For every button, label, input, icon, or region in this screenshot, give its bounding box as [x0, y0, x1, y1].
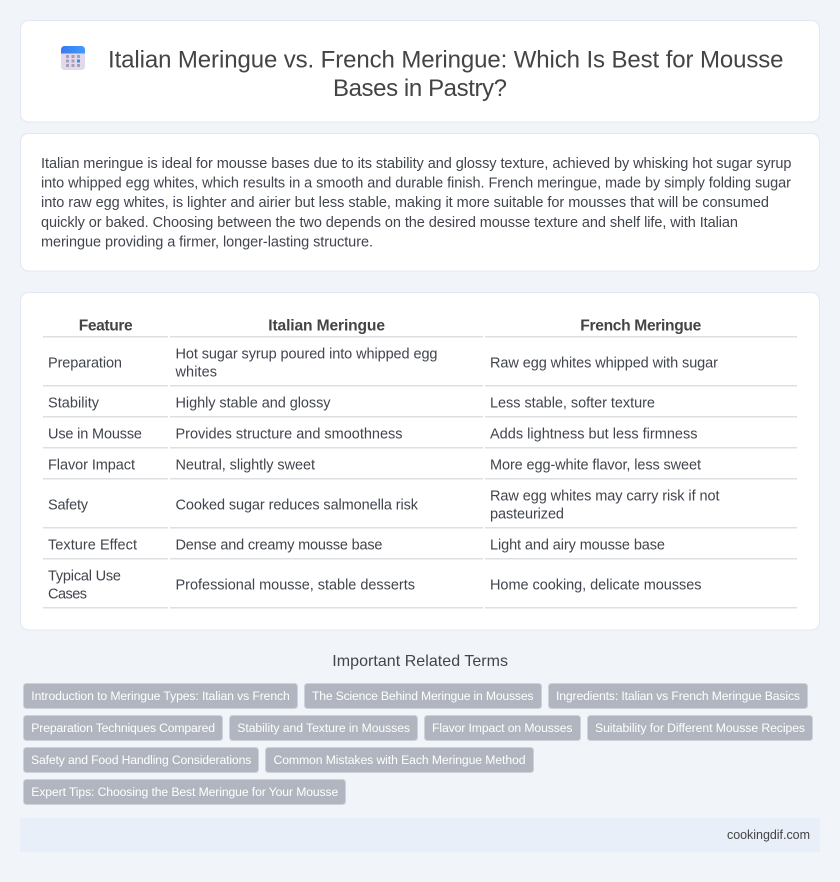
- tag: Suitability for Different Mousse Recipes: [595, 721, 805, 735]
- row: safety: pasteurized: [490, 506, 564, 522]
- intro text block: into raw egg whites, is lighter and airier but less stable, making it more suitable for mousses that will be consumed: [41, 195, 769, 211]
- row: stability: Less stable, softer texture: [490, 395, 655, 411]
- panel: title header: [20, 20, 820, 122]
- row: preparation: whites: [174, 364, 217, 380]
- row: safety: Safety: [48, 497, 89, 513]
- table header row: Feature: [79, 318, 133, 334]
- row: preparation: Raw egg whites whipped with sugar: [490, 355, 718, 371]
- row: typical use cases: Home cooking, delicate mousses: [490, 577, 702, 593]
- row: typical use cases: Professional mousse, stable desserts: [176, 577, 415, 593]
- row: stability: [43, 395, 797, 418]
- row: typical use cases: Typical Use: [48, 568, 121, 584]
- row: flavor impact: Neutral, slightly sweet: [176, 457, 315, 473]
- footer bar: [20, 818, 820, 852]
- row: use in mousse: [43, 426, 797, 448]
- tag: Common Mistakes with Each Meringue Method: [274, 753, 526, 767]
- panel: intro paragraph: [20, 134, 820, 271]
- row: texture effect: Texture Effect: [48, 537, 137, 553]
- row: flavor impact: Flavor Impact: [48, 457, 135, 473]
- tag: [304, 684, 542, 708]
- tag: [24, 748, 258, 772]
- row: use in mousse: Use in Mousse: [48, 426, 142, 442]
- tag: [266, 748, 534, 772]
- intro text block: quickly or baked. Choosing between the two depends on the desired mousse texture and shelf life, with Italian: [41, 215, 738, 231]
- icon: calendar: [61, 46, 85, 70]
- row: texture effect: Dense and creamy mousse base: [176, 537, 382, 553]
- row: preparation: Preparation: [48, 355, 122, 371]
- row: preparation: [43, 346, 797, 386]
- panel: comparison table: [20, 292, 820, 630]
- tag: Introduction to Meringue Types: Italian vs French: [31, 689, 290, 703]
- intro text block: meringue providing a firmer, longer-lasting structure.: [41, 234, 373, 250]
- tag: The Science Behind Meringue in Mousses: [312, 689, 534, 703]
- intro text block: [41, 156, 792, 250]
- row: typical use cases: Cases: [48, 586, 87, 602]
- title: Bases in Pastry?: [333, 75, 507, 102]
- heading: important related terms: Important Related Terms: [332, 653, 508, 670]
- title: [108, 46, 784, 102]
- row: texture effect: Light and airy mousse base: [490, 537, 665, 553]
- tag: [24, 716, 222, 740]
- intro text block: into whipped egg whites, which results in a smooth and durable finish. French meringue, made by simply folding sugar: [41, 176, 791, 192]
- tag: [230, 716, 418, 740]
- table header row: Italian Meringue: [268, 318, 385, 334]
- footer source link: cookingdif.com: [727, 828, 810, 842]
- row: flavor impact: [43, 457, 797, 480]
- row: stability: Stability: [48, 395, 100, 411]
- tag: [424, 716, 580, 740]
- row: use in mousse: Adds lightness but less firmness: [490, 426, 698, 442]
- tag: Flavor Impact on Mousses: [432, 721, 572, 735]
- row: stability: Highly stable and glossy: [176, 395, 331, 411]
- row: use in mousse: Provides structure and smoothness: [176, 426, 402, 442]
- tag: [548, 684, 808, 708]
- tag: [24, 780, 346, 804]
- tag list: related terms: [24, 684, 812, 804]
- intro text block: Italian meringue is ideal for mousse bases due to its stability and glossy texture, achieved by whisking hot sugar syrup: [41, 156, 792, 172]
- tag: Ingredients: Italian vs French Meringue Basics: [556, 689, 800, 703]
- row: texture effect: [43, 537, 797, 560]
- tag: Safety and Food Handling Considerations: [31, 753, 251, 767]
- row: typical use cases: [43, 568, 797, 608]
- table header row: French Meringue: [580, 318, 702, 334]
- tag: Expert Tips: Choosing the Best Meringue for Your Mousse: [31, 785, 339, 799]
- title: Italian Meringue vs. French Meringue: Which Is Best for Mousse: [108, 46, 784, 74]
- tag: Stability and Texture in Mousses: [237, 721, 410, 735]
- row: flavor impact: More egg-white flavor, less sweet: [490, 457, 701, 473]
- tag: [24, 684, 298, 708]
- row: safety: [43, 488, 797, 528]
- row: safety: Raw egg whites may carry risk if not: [490, 488, 720, 504]
- row: preparation: Hot sugar syrup poured into whipped egg: [176, 346, 438, 362]
- table header row: [43, 318, 797, 338]
- row: safety: Cooked sugar reduces salmonella risk: [176, 497, 419, 513]
- tag: [588, 716, 812, 740]
- tag: Preparation Techniques Compared: [31, 721, 215, 735]
